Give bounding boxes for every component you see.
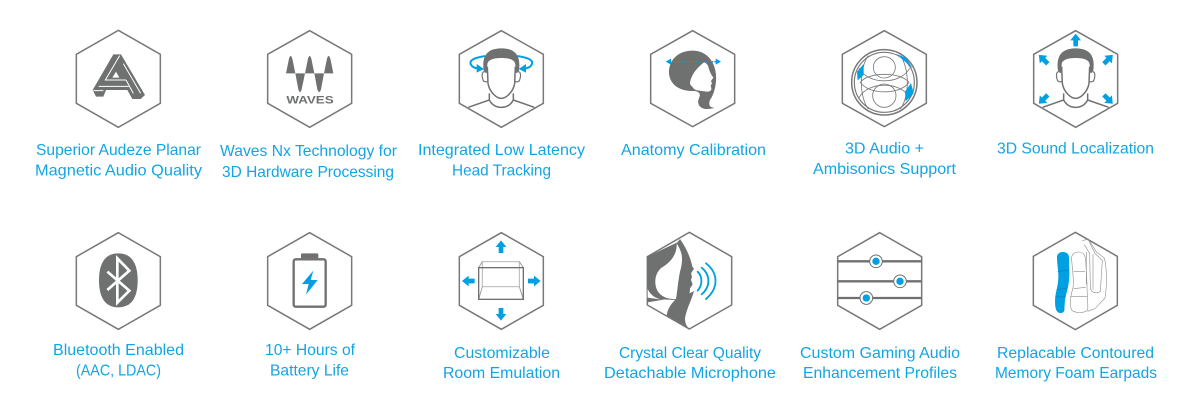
label text: (AAC, LDAC) bbox=[76, 362, 161, 380]
label text: Enhancement Profiles bbox=[803, 365, 957, 382]
icon: headphone with blue earpad in hexagon bbox=[1033, 232, 1117, 330]
icon: female profile with dotted arrow in hexagon bbox=[651, 31, 735, 127]
panel: 3D Sound Localization bbox=[997, 31, 1154, 158]
panel: Battery bbox=[265, 233, 356, 380]
label text: Bluetooth Enabled bbox=[53, 342, 184, 359]
panel: Head Tracking bbox=[418, 31, 585, 180]
label text: Anatomy Calibration bbox=[621, 142, 766, 159]
label text: Crystal Clear Quality bbox=[619, 345, 761, 362]
label text bbox=[53, 342, 184, 380]
panel: Microphone bbox=[604, 232, 776, 382]
panel: Superior Audeze Planar bbox=[35, 30, 202, 179]
panel: Gaming Audio Profiles bbox=[800, 233, 960, 382]
icon: Bluetooth in hexagon bbox=[76, 233, 160, 329]
icon: battery in hexagon bbox=[268, 233, 352, 329]
label text: Room Emulation bbox=[443, 365, 560, 382]
panel: Waves Nx bbox=[220, 31, 398, 181]
label text: Waves Nx Technology for bbox=[220, 143, 398, 160]
label text bbox=[35, 142, 202, 180]
label text bbox=[418, 142, 585, 180]
label text bbox=[265, 342, 356, 380]
label text: Replacable Contoured bbox=[997, 345, 1154, 362]
panel: Room Emulation bbox=[443, 233, 560, 382]
label text: Memory Foam Earpads bbox=[995, 365, 1157, 382]
label text: Customizable bbox=[454, 345, 550, 362]
label text: Detachable Microphone bbox=[604, 365, 776, 382]
icon: Waves logo in hexagon bbox=[268, 31, 352, 127]
label text bbox=[604, 345, 776, 382]
label text: Custom Gaming Audio bbox=[800, 345, 960, 362]
panel: 3D Audio bbox=[813, 31, 957, 178]
icon: Audeze logo in hexagon bbox=[76, 30, 160, 127]
panel: Earpads bbox=[995, 232, 1157, 382]
icon: head with rotation arrows in hexagon bbox=[459, 31, 543, 127]
label text: Ambisonics Support bbox=[813, 161, 957, 178]
label text bbox=[443, 345, 560, 382]
icon: room box with arrows in hexagon bbox=[459, 233, 543, 329]
icon: Waves logo in hexagon: WAVES bbox=[286, 95, 334, 107]
label text: 3D Sound Localization bbox=[997, 140, 1154, 158]
label text bbox=[800, 345, 960, 382]
label text: Superior Audeze Planar bbox=[36, 142, 202, 159]
label text: 3D Audio + bbox=[845, 140, 924, 158]
label text: Magnetic Audio Quality bbox=[35, 162, 202, 180]
label text: Battery Life bbox=[270, 362, 349, 380]
icon: sliders in hexagon bbox=[838, 233, 922, 329]
icon: ambisonics sphere in hexagon bbox=[842, 31, 926, 127]
label text: Head Tracking bbox=[452, 162, 551, 180]
label text: 10+ Hours of bbox=[265, 342, 356, 359]
label text bbox=[220, 143, 398, 181]
panel: Bluetooth bbox=[53, 233, 184, 380]
panel: Anatomy Calibration bbox=[621, 31, 766, 159]
icon: speaking profile with sound waves in hexagon bbox=[647, 232, 732, 329]
label text: Integrated Low Latency bbox=[418, 142, 585, 159]
label text bbox=[995, 345, 1157, 382]
icon: head with outward arrows in hexagon bbox=[1034, 31, 1118, 127]
label text bbox=[813, 140, 957, 178]
label text: 3D Hardware Processing bbox=[222, 164, 394, 181]
